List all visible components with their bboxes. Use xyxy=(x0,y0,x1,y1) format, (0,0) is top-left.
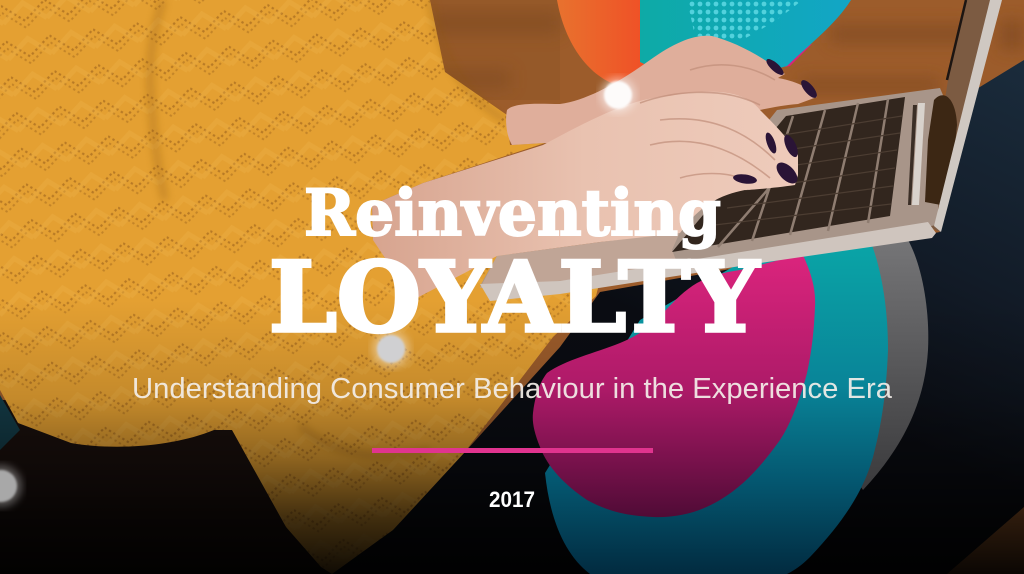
title: Reinventing: Reinventing xyxy=(304,176,721,251)
upper hand xyxy=(506,36,817,145)
beige base left of keyboard xyxy=(480,232,680,288)
pink divider xyxy=(372,448,653,453)
front silver edge xyxy=(480,222,936,301)
teal sliver, far left xyxy=(0,395,20,450)
lower hand and forearm xyxy=(372,92,798,300)
jeans xyxy=(330,60,1024,574)
finger creases xyxy=(640,65,775,178)
top teal blob xyxy=(640,0,851,90)
glowing dot: hand xyxy=(600,77,636,113)
deck xyxy=(480,88,945,286)
laptop xyxy=(480,0,1002,301)
nails xyxy=(732,57,820,187)
glowing dot: left edge xyxy=(0,465,22,507)
top orange blob xyxy=(557,0,650,90)
screen lid xyxy=(925,0,1000,232)
lid edge xyxy=(934,0,1002,232)
glowing dot: sweater xyxy=(372,330,410,368)
sweater xyxy=(0,0,600,574)
sweater fold shading xyxy=(150,0,505,456)
pink sliver xyxy=(785,44,812,67)
hands xyxy=(372,36,820,300)
dark bottom fade xyxy=(0,300,1024,574)
lower teal blob xyxy=(545,240,888,574)
keyboard xyxy=(672,97,905,252)
hinge xyxy=(925,95,957,205)
year: 2017 xyxy=(489,487,535,512)
halftone dots xyxy=(687,0,802,40)
subtitle: Understanding Consumer Behaviour in the Experience Era xyxy=(132,373,893,405)
lower gray blob xyxy=(800,240,928,490)
speaker strip xyxy=(912,103,925,205)
title: LOYALTY: LOYALTY xyxy=(269,241,760,354)
floor shadow, bottom left xyxy=(0,400,400,574)
lower magenta blob xyxy=(533,255,815,517)
